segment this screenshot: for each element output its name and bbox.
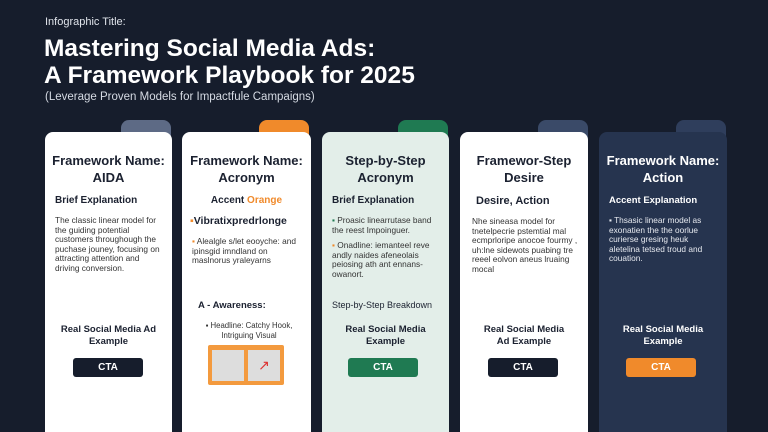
panel: Desire: CTA bbox=[513, 362, 533, 373]
panel: Step-by-Step green: Acronym bbox=[357, 170, 414, 185]
panel: Acronym orange: Intriguing Visual bbox=[221, 330, 277, 340]
panel: Action dark: Framework Name: bbox=[607, 153, 719, 168]
panel: Step-by-Step green: ▪ Onadline: iemanteel reve andly naides afeneolais peiosing ath ant ennans-owanort. bbox=[332, 240, 430, 278]
panel: Step-by-Step green: CTA bbox=[373, 362, 393, 373]
panel: Step-by-Step green: Step-by-Step Breakdown bbox=[332, 300, 432, 310]
panel: AIDA: Real Social Media Ad bbox=[61, 324, 156, 335]
title: Mastering Social Media Ads: bbox=[44, 35, 375, 62]
panel: AIDA: Framework Name: bbox=[52, 153, 165, 168]
panel: Action dark: CTA bbox=[651, 362, 671, 373]
subtitle: (Leverage Proven Models for Impactfule Campaigns) bbox=[45, 91, 315, 103]
panel: Desire: Desire bbox=[504, 170, 544, 185]
title bbox=[44, 35, 415, 89]
panel: Desire: Framewor-Step bbox=[477, 153, 571, 168]
panel: AIDA: Example bbox=[89, 336, 128, 347]
panel: Acronym orange: ▪ Headline: Catchy Hook, bbox=[206, 321, 292, 330]
panel: Acronym orange: Accent Orange bbox=[211, 195, 282, 206]
panel: Acronym orange: ▪Vibratixpredrlonge bbox=[190, 215, 287, 227]
kicker: Infographic Title: bbox=[45, 16, 126, 28]
panel: Step-by-Step green: ▪ Proasic linearrutase band the reest Impoinguer. bbox=[332, 215, 431, 234]
panel: Action dark: Action bbox=[643, 170, 683, 185]
panel: Action dark: Accent Explanation bbox=[609, 195, 697, 206]
panel: Desire: Real Social Media bbox=[484, 324, 564, 335]
panel: Desire: Desire, Action bbox=[476, 195, 550, 207]
panel: Desire bbox=[460, 132, 588, 432]
panel: Acronym orange: A - Awareness: bbox=[198, 300, 266, 311]
panel: AIDA: AIDA bbox=[93, 170, 124, 185]
ad mockup: ↗ bbox=[258, 357, 270, 373]
panel: AIDA: The classic linear model for the guiding potential customers throughough the puchase jouney, focusing on attracting attention and driving conversion. bbox=[55, 215, 160, 272]
panel: Action dark: Example bbox=[643, 336, 683, 347]
panel: AIDA bbox=[45, 132, 172, 432]
panel: Step-by-Step green: Example bbox=[366, 336, 405, 347]
panel: Action dark bbox=[599, 132, 727, 432]
panel: Acronym orange bbox=[182, 132, 311, 432]
decorative tabs bbox=[121, 120, 171, 160]
panel: Step-by-Step green bbox=[322, 132, 449, 432]
panel: Desire: Nhe sineasa model for tnetelpecrie pstemtial mal ecmprloripe anocoe fourmy , uh:lne sidewots puabing tre reeel eolvon aneus lruaing mocal bbox=[472, 216, 577, 274]
panel: Acronym orange: ▪ Alealgle s/let eooyche: and ipinsgid imndland on maslnorus yraleyarns bbox=[192, 236, 296, 265]
panel: Step-by-Step green: Step-by-Step bbox=[345, 153, 426, 168]
panel: AIDA: CTA bbox=[98, 362, 118, 373]
panel: Action dark: ▪ Thsasic linear model as exonatien the the oorlue curierse gresing heuk aletelina tetsed troud and couation. bbox=[609, 215, 702, 263]
panel: AIDA: Brief Explanation bbox=[55, 195, 137, 206]
panel: Step-by-Step green: Brief Explanation bbox=[332, 195, 414, 206]
panel: Action dark: Real Social Media bbox=[623, 324, 703, 335]
title: A Framework Playbook for 2025 bbox=[44, 62, 415, 89]
panel: Desire: Ad Example bbox=[497, 336, 551, 347]
panel: Step-by-Step green: Real Social Media bbox=[345, 324, 426, 335]
ad mockup bbox=[208, 345, 284, 385]
panel: Acronym orange: Framework Name: bbox=[190, 153, 303, 168]
panel: Acronym orange: Acronym bbox=[218, 170, 275, 185]
